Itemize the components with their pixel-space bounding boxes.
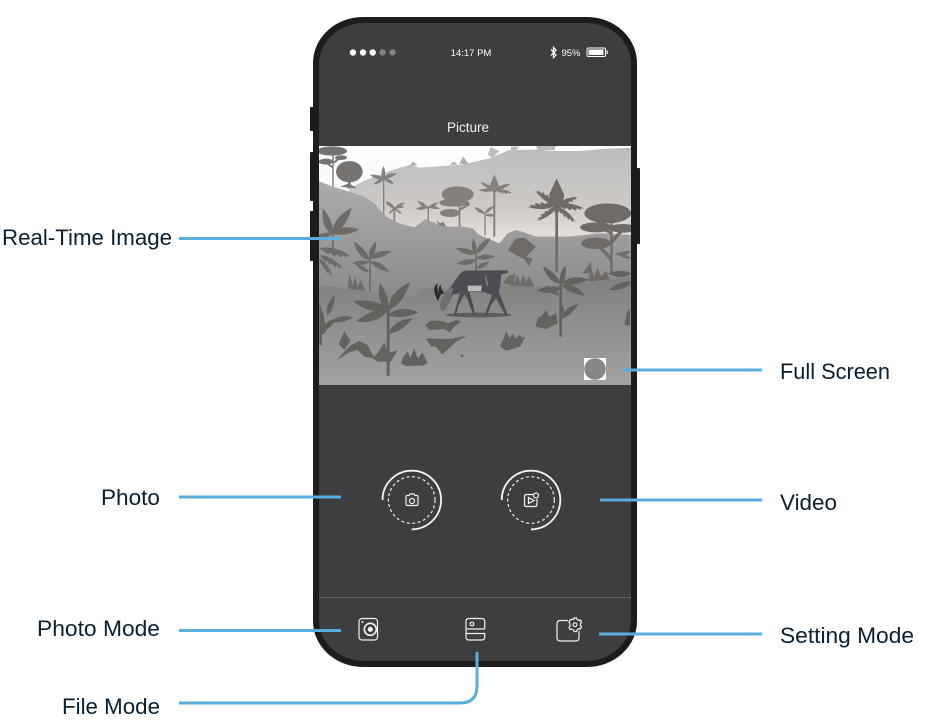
big palm [555, 205, 558, 272]
deer [434, 270, 508, 316]
label: Setting Mode: Setting Mode [780, 623, 914, 648]
top-left tree [327, 155, 343, 187]
label: Full Screen: Full Screen [780, 359, 890, 384]
status bar [350, 48, 608, 59]
right banana plant [559, 280, 562, 337]
icon: photo mode [359, 618, 378, 640]
distant palms and trees [370, 166, 513, 237]
side buttons [310, 107, 640, 261]
leaf clump under deer [425, 320, 461, 332]
signal dots [350, 49, 396, 56]
mid hill [319, 181, 631, 297]
hill banana plant center [475, 253, 477, 272]
far hills [349, 148, 631, 244]
battery percent: 95% [561, 48, 581, 59]
ground vine [339, 331, 350, 350]
label: File Mode: File Mode [62, 694, 160, 719]
right edge palm [616, 252, 631, 258]
hill banana plant left [369, 253, 371, 293]
phone [310, 17, 640, 667]
deer shadow [445, 313, 512, 317]
photo button [382, 471, 441, 529]
right edge leaves [608, 271, 631, 277]
left edge plants [319, 302, 326, 345]
icon: setting mode [557, 618, 582, 641]
label: Video: Video [780, 490, 837, 515]
bottom divider [319, 597, 631, 598]
full screen button [584, 358, 606, 380]
label: Photo Mode: Photo Mode [37, 616, 160, 641]
label: Real-Time Image: Real-Time Image [2, 225, 172, 250]
icon: file mode [466, 618, 485, 640]
bluetooth icon [551, 48, 556, 58]
real-time image [316, 146, 636, 390]
icon: camera [406, 494, 418, 506]
hillside trees [317, 146, 363, 188]
foreground ground [316, 277, 631, 390]
grass tufts on hill [348, 273, 366, 292]
video button [502, 471, 560, 529]
large banana plant [387, 305, 390, 376]
time: 14:17 PM [451, 48, 491, 59]
label: File Mode [62, 652, 477, 719]
foreground plants [319, 265, 632, 376]
right acacia tree [584, 203, 631, 223]
small tufts [500, 331, 525, 351]
screen title: Picture [447, 120, 489, 135]
left palm cluster [322, 208, 333, 233]
screen [319, 23, 631, 661]
phone body [313, 17, 637, 667]
battery icon [587, 48, 608, 56]
icon: video [524, 493, 538, 506]
leaf clump [508, 238, 536, 267]
label: Photo: Photo [101, 485, 160, 510]
